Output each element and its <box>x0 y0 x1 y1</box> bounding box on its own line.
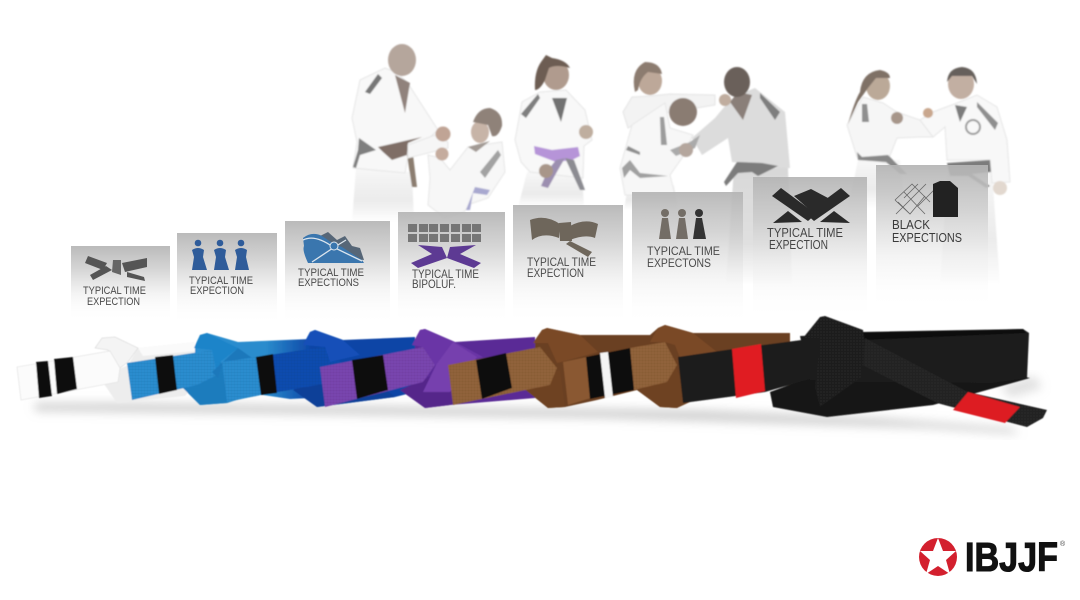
purple knot top <box>412 329 483 392</box>
dark blue knot top <box>303 330 360 362</box>
label <box>412 269 479 291</box>
label: BIPOLUF. <box>412 279 456 291</box>
panel 3: dark blue belt <box>285 221 390 325</box>
label: TYPICAL TIME <box>83 285 146 297</box>
brown tail with black stripe <box>448 347 557 405</box>
logo: IBJJF <box>919 534 1066 580</box>
brown lower fold <box>523 370 565 408</box>
panel 7: black belt crossed <box>753 177 867 320</box>
panel 1: white belt <box>71 246 170 322</box>
label: BLACK <box>892 218 931 232</box>
label <box>892 218 962 245</box>
panel 6: brown-black belt <box>632 192 743 325</box>
brown belt underlay <box>523 325 790 408</box>
light blue lower knot fold <box>183 362 255 405</box>
dark blue belt underlay <box>293 330 415 407</box>
woman and man gripping <box>847 67 1010 285</box>
label: TYPICAL TIME <box>298 267 364 279</box>
icon: crossed black belt <box>772 188 850 223</box>
black belt back loop <box>770 329 1030 417</box>
label: EXPECTION <box>87 296 140 308</box>
black knot and hanging tail <box>803 316 1047 427</box>
label: EXPECTION <box>769 238 828 252</box>
light blue tail with black stripe <box>127 350 217 400</box>
icon: blue belt with mountains <box>303 232 364 263</box>
brown knot top <box>533 328 598 363</box>
label: EXPECTION <box>190 285 244 297</box>
registered mark: ® <box>1060 540 1066 548</box>
icon: three pawns <box>659 209 706 239</box>
man and child <box>352 44 505 222</box>
icon: red circle with white star <box>919 538 957 576</box>
icon: brown belt knot <box>530 218 598 257</box>
dark blue lower fold <box>293 370 395 407</box>
panel 4: purple belt <box>398 212 505 325</box>
label <box>527 257 596 280</box>
two practitioners bending <box>620 62 792 285</box>
light blue knot top <box>194 333 255 378</box>
people: jiu-jitsu practitioners <box>352 44 1010 285</box>
purple tail with black stripe <box>320 347 435 407</box>
icon: grid and purple belt <box>408 224 481 268</box>
panel 5: brown belt <box>513 205 623 325</box>
icon: net and black panel <box>895 181 958 217</box>
label: EXPECTION <box>527 268 584 280</box>
ground shadow <box>35 376 1042 434</box>
icon: white belt knot <box>85 256 147 281</box>
brown band with black and white stripes <box>563 342 677 405</box>
purple lower fold <box>400 372 470 408</box>
second brown knot top <box>650 325 717 358</box>
light blue to dark blue front band with black stripe <box>222 347 345 402</box>
panel 2: blue belt <box>177 233 277 325</box>
woman with purple belt <box>515 55 593 208</box>
label <box>767 226 843 252</box>
panel 8: black expectations <box>876 165 988 310</box>
purple belt underlay <box>400 329 535 408</box>
label: EXPECTIONS <box>892 231 962 245</box>
second brown lower fold <box>637 365 690 408</box>
label <box>647 244 720 270</box>
belts row <box>17 316 1047 427</box>
label: TYPICAL TIME <box>767 226 843 240</box>
label: TYPICAL TIME <box>189 275 253 287</box>
icon: three blue figures <box>192 240 249 270</box>
light blue belt underlay <box>183 333 310 405</box>
label <box>189 275 253 297</box>
label: TYPICAL TIME <box>412 269 479 281</box>
label: EXPECTIONS <box>298 277 359 289</box>
wordmark: IBJJF <box>965 534 1058 580</box>
label <box>298 267 364 289</box>
white belt back band and knot <box>95 337 195 403</box>
label: TYPICAL TIME <box>647 244 720 258</box>
black tail with red stripe <box>678 338 817 403</box>
white belt tail with two black stripes <box>17 351 120 400</box>
label: EXPECTONS <box>647 256 711 270</box>
label: TYPICAL TIME <box>527 257 596 269</box>
label <box>83 285 146 308</box>
